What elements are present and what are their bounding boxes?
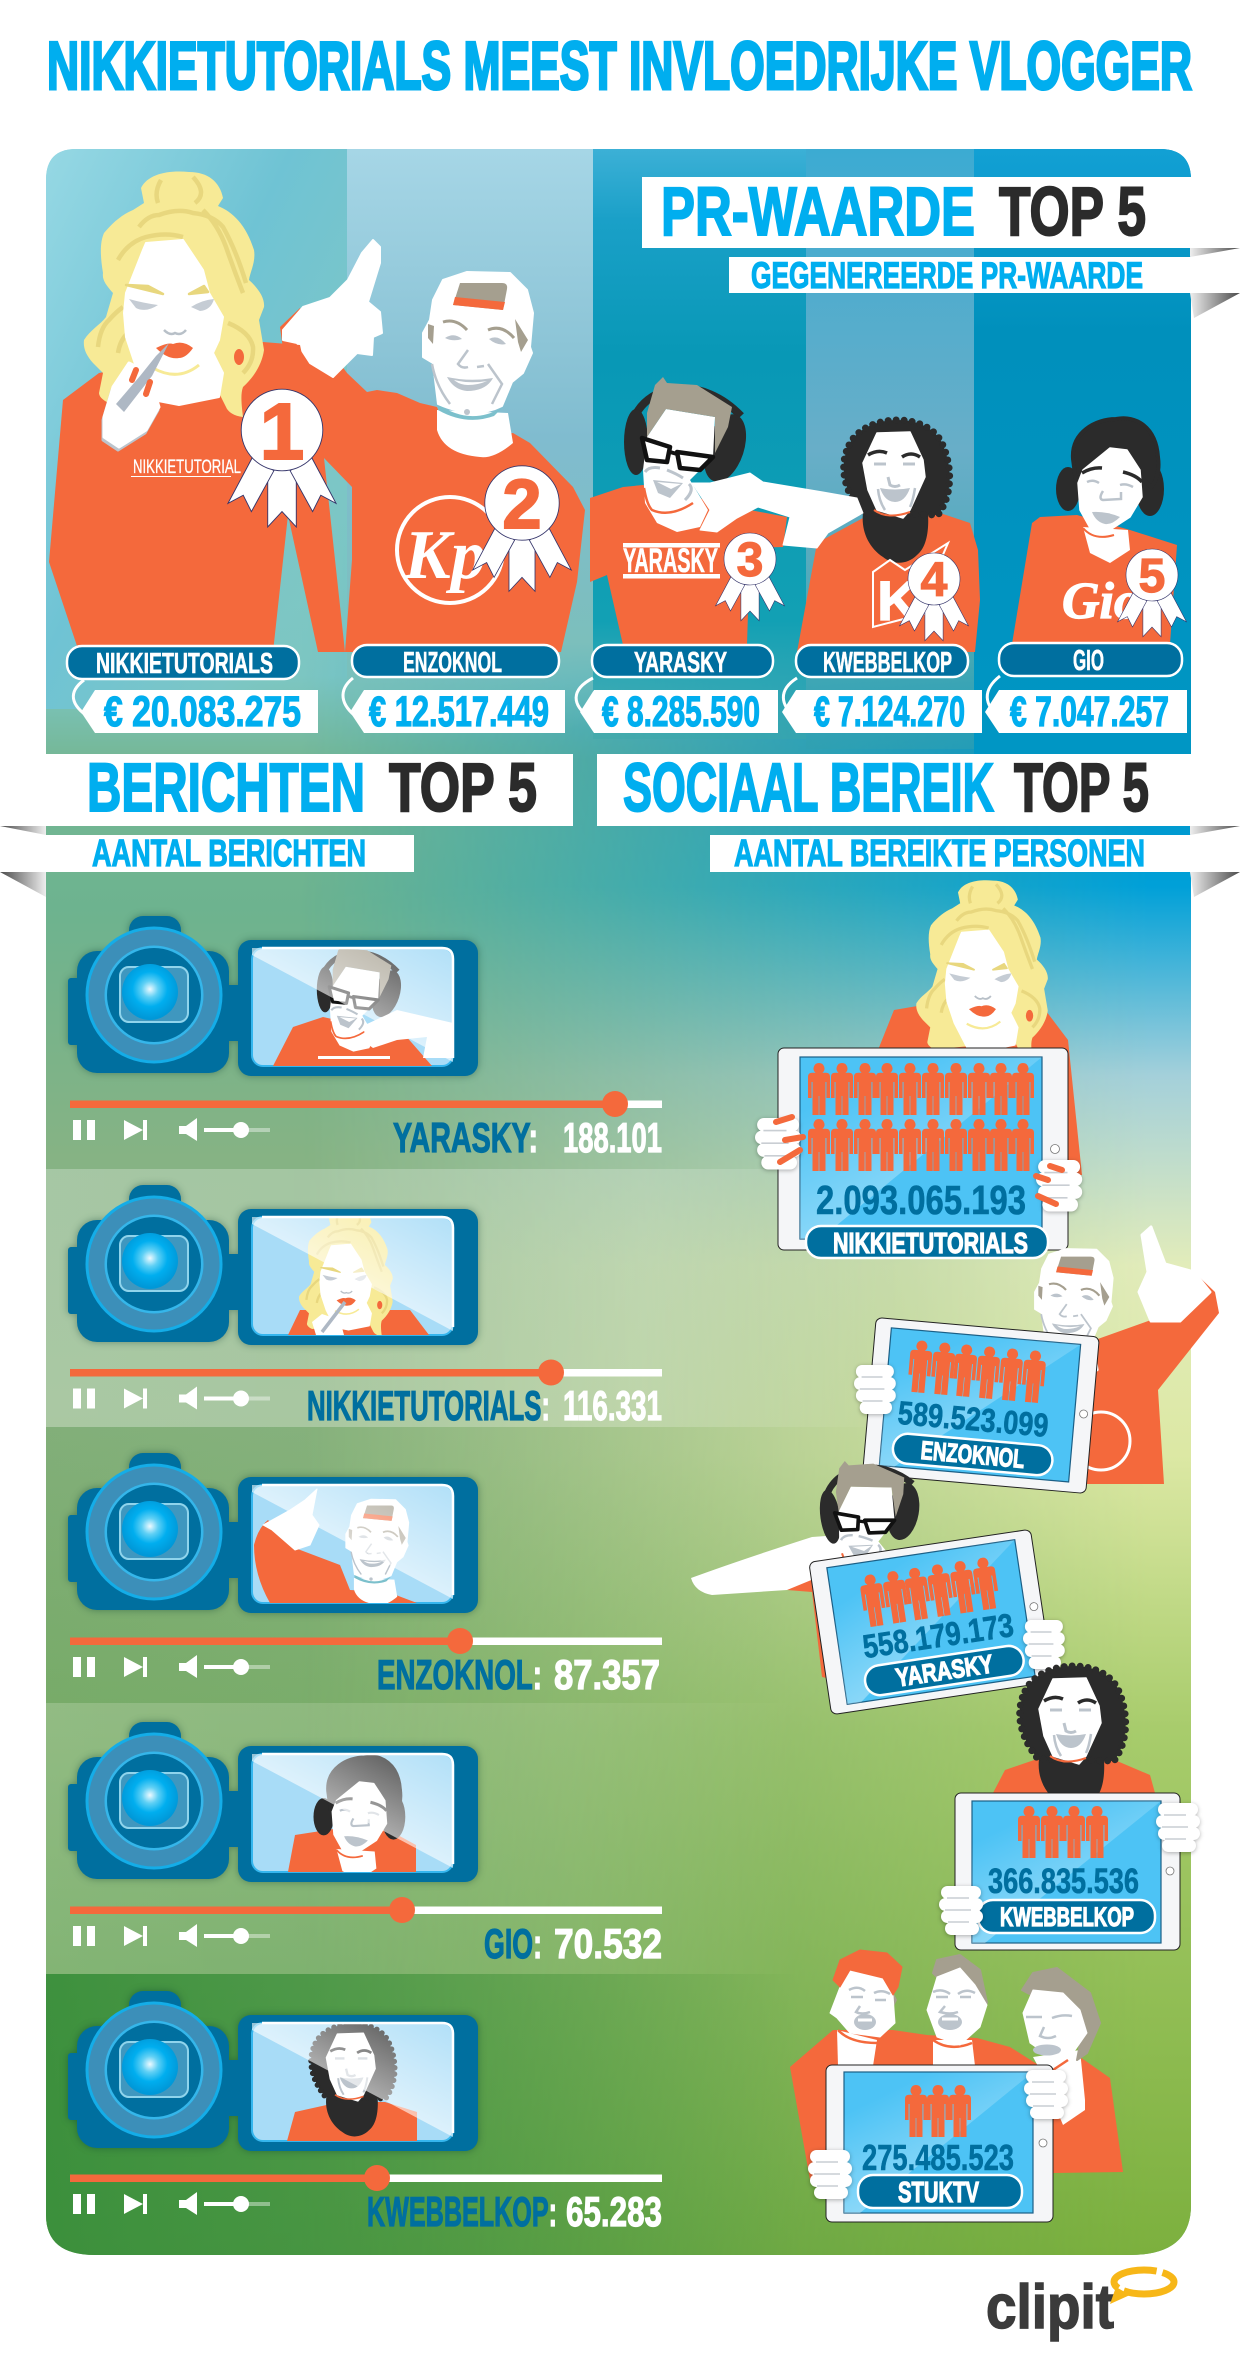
ribbon 5 — [1118, 549, 1186, 637]
row: Gio 70.532 — [68, 1722, 662, 1967]
row: Gio 70.532: GIO: — [484, 1920, 542, 1967]
panel: berichten rows — [68, 916, 662, 2235]
label: Gio value: GIO — [1073, 645, 1104, 677]
label: Yarasky value: € 8.285.590 — [602, 688, 760, 736]
banner: PR-waarde top 5 — [642, 173, 1240, 318]
person: left with cap — [830, 1950, 902, 2066]
label: Enzoknol value: ENZOKNOL — [403, 647, 502, 679]
label: Kwebbelkop value: KWEBBELKOP — [823, 647, 952, 679]
tablet figure: Enzoknol 589.523.099 — [854, 1227, 1219, 1493]
figure: Kwebbelkop: K — [877, 569, 919, 632]
tablet figure: Yarasky 558.179.173 — [691, 1451, 1065, 1715]
tablet figure: Enzoknol 589.523.099: 589.523.099 — [896, 1394, 1050, 1444]
figure: Enzoknol body with raised arm — [280, 240, 585, 652]
label: Yarasky value: YARASKY — [634, 647, 727, 679]
banner: Sociaal bereik top 5: TOP 5 — [1014, 749, 1149, 826]
figure: Gio — [1012, 418, 1177, 644]
ribbon 3: 3 — [737, 534, 763, 587]
banner: Berichten top 5: AANTAL BERICHTEN — [92, 833, 366, 875]
tablet figure: StukTV 275.485.523: STUKTV — [898, 2177, 979, 2209]
figure: Kwebbelkop — [797, 420, 980, 652]
figure: Enzoknol body with raised arm: Kp — [403, 517, 486, 594]
label: Gio value: € 7.047.257 — [1010, 688, 1169, 736]
row: NikkieTutorials 116.331 — [68, 1185, 662, 1429]
tablet figure: Kwebbelkop 366.835.536: 366.835.536 — [988, 1862, 1139, 1901]
label: NikkieTutorials value: € 20.083.275 — [104, 688, 301, 736]
tablet figure: NikkieTutorials 2.093.065.193: NIKKIETUTORIALS — [833, 1228, 1028, 1260]
banner: Berichten top 5: BERICHTEN — [87, 749, 365, 826]
row: Kwebbelkop 65.283 — [68, 1991, 662, 2235]
row: NikkieTutorials 116.331: NIKKIETUTORIALS: — [307, 1382, 550, 1429]
row: Yarasky 188.101: 188.101 — [563, 1114, 662, 1161]
label: NikkieTutorials value — [67, 646, 318, 736]
row: Enzoknol 87.357: 87.357 — [554, 1651, 660, 1698]
banner: PR-waarde top 5: PR-WAARDE — [661, 173, 975, 250]
ribbon 1: 1 — [260, 387, 304, 476]
ribbon 2 — [473, 465, 571, 591]
tablet figure: NikkieTutorials 2.093.065.193 — [755, 880, 1082, 1260]
ribbon 4: 4 — [921, 554, 948, 607]
row: Kwebbelkop 65.283: KWEBBELKOP: — [367, 2188, 557, 2235]
label: Kwebbelkop value: € 7.124.270 — [814, 688, 965, 736]
panel: PR-waarde figures — [49, 172, 1186, 652]
label: Enzoknol value — [343, 645, 565, 736]
row: NikkieTutorials 116.331: 116.331 — [563, 1382, 662, 1429]
panel: sociaal bereik — [691, 880, 1219, 2222]
banner: PR-waarde top 5: TOP 5 — [999, 173, 1146, 250]
figure: Yarasky: YARASKY — [623, 542, 718, 580]
label: Yarasky value — [576, 645, 778, 736]
figure: NikkieTutorials: NIKKIETUTORIAL — [133, 457, 241, 478]
label: Gio value — [985, 643, 1187, 736]
banner: Berichten top 5 — [0, 749, 573, 897]
label: NikkieTutorials value: NIKKIETUTORIALS — [96, 648, 273, 680]
label: Enzoknol value: € 12.517.449 — [369, 688, 549, 736]
label: Kwebbelkop value — [782, 645, 982, 736]
ribbon 5: 5 — [1139, 550, 1165, 603]
banner: Sociaal bereik top 5: SOCIAAL BEREIK — [623, 749, 994, 826]
tablet figure: Kwebbelkop 366.835.536 — [939, 1666, 1200, 1950]
ribbon 3 — [716, 533, 784, 621]
tablet figure: StukTV 275.485.523 — [790, 1950, 1123, 2222]
ribbon 2: 2 — [503, 465, 541, 543]
row: Enzoknol 87.357: ENZOKNOL: — [377, 1651, 542, 1698]
ribbon 1 — [228, 387, 336, 527]
ranking labels and values — [67, 643, 1187, 736]
tablet figure: Yarasky 558.179.173: YARASKY — [894, 1648, 995, 1693]
row: Enzoknol 87.357 — [68, 1453, 662, 1698]
banner: Berichten top 5: TOP 5 — [389, 749, 537, 826]
row: Yarasky 188.101: YARASKY: — [393, 1114, 538, 1161]
banner: Sociaal bereik top 5 — [597, 749, 1240, 897]
figure: Gio: Gio — [1062, 573, 1140, 630]
tablet figure: Enzoknol 589.523.099: ENZOKNOL — [920, 1435, 1026, 1474]
figure: NikkieTutorials — [49, 172, 345, 652]
row: Yarasky 188.101 — [68, 916, 662, 1161]
ribbon 4 — [900, 553, 968, 641]
logo: clipit: clipit — [986, 2273, 1114, 2342]
row: Kwebbelkop 65.283: 65.283 — [566, 2188, 662, 2235]
person: middle — [927, 1955, 987, 2066]
row: Gio 70.532: 70.532 — [554, 1920, 662, 1967]
tablet figure: NikkieTutorials 2.093.065.193: 2.093.065.193 — [816, 1177, 1026, 1223]
tablet figure: StukTV 275.485.523: 275.485.523 — [862, 2137, 1014, 2178]
tablet figure: Yarasky 558.179.173: 558.179.173 — [860, 1606, 1016, 1665]
person: right — [1022, 1968, 1100, 2125]
tablet figure: Kwebbelkop 366.835.536: KWEBBELKOP — [1000, 1902, 1134, 1932]
figure: Yarasky — [590, 377, 863, 645]
